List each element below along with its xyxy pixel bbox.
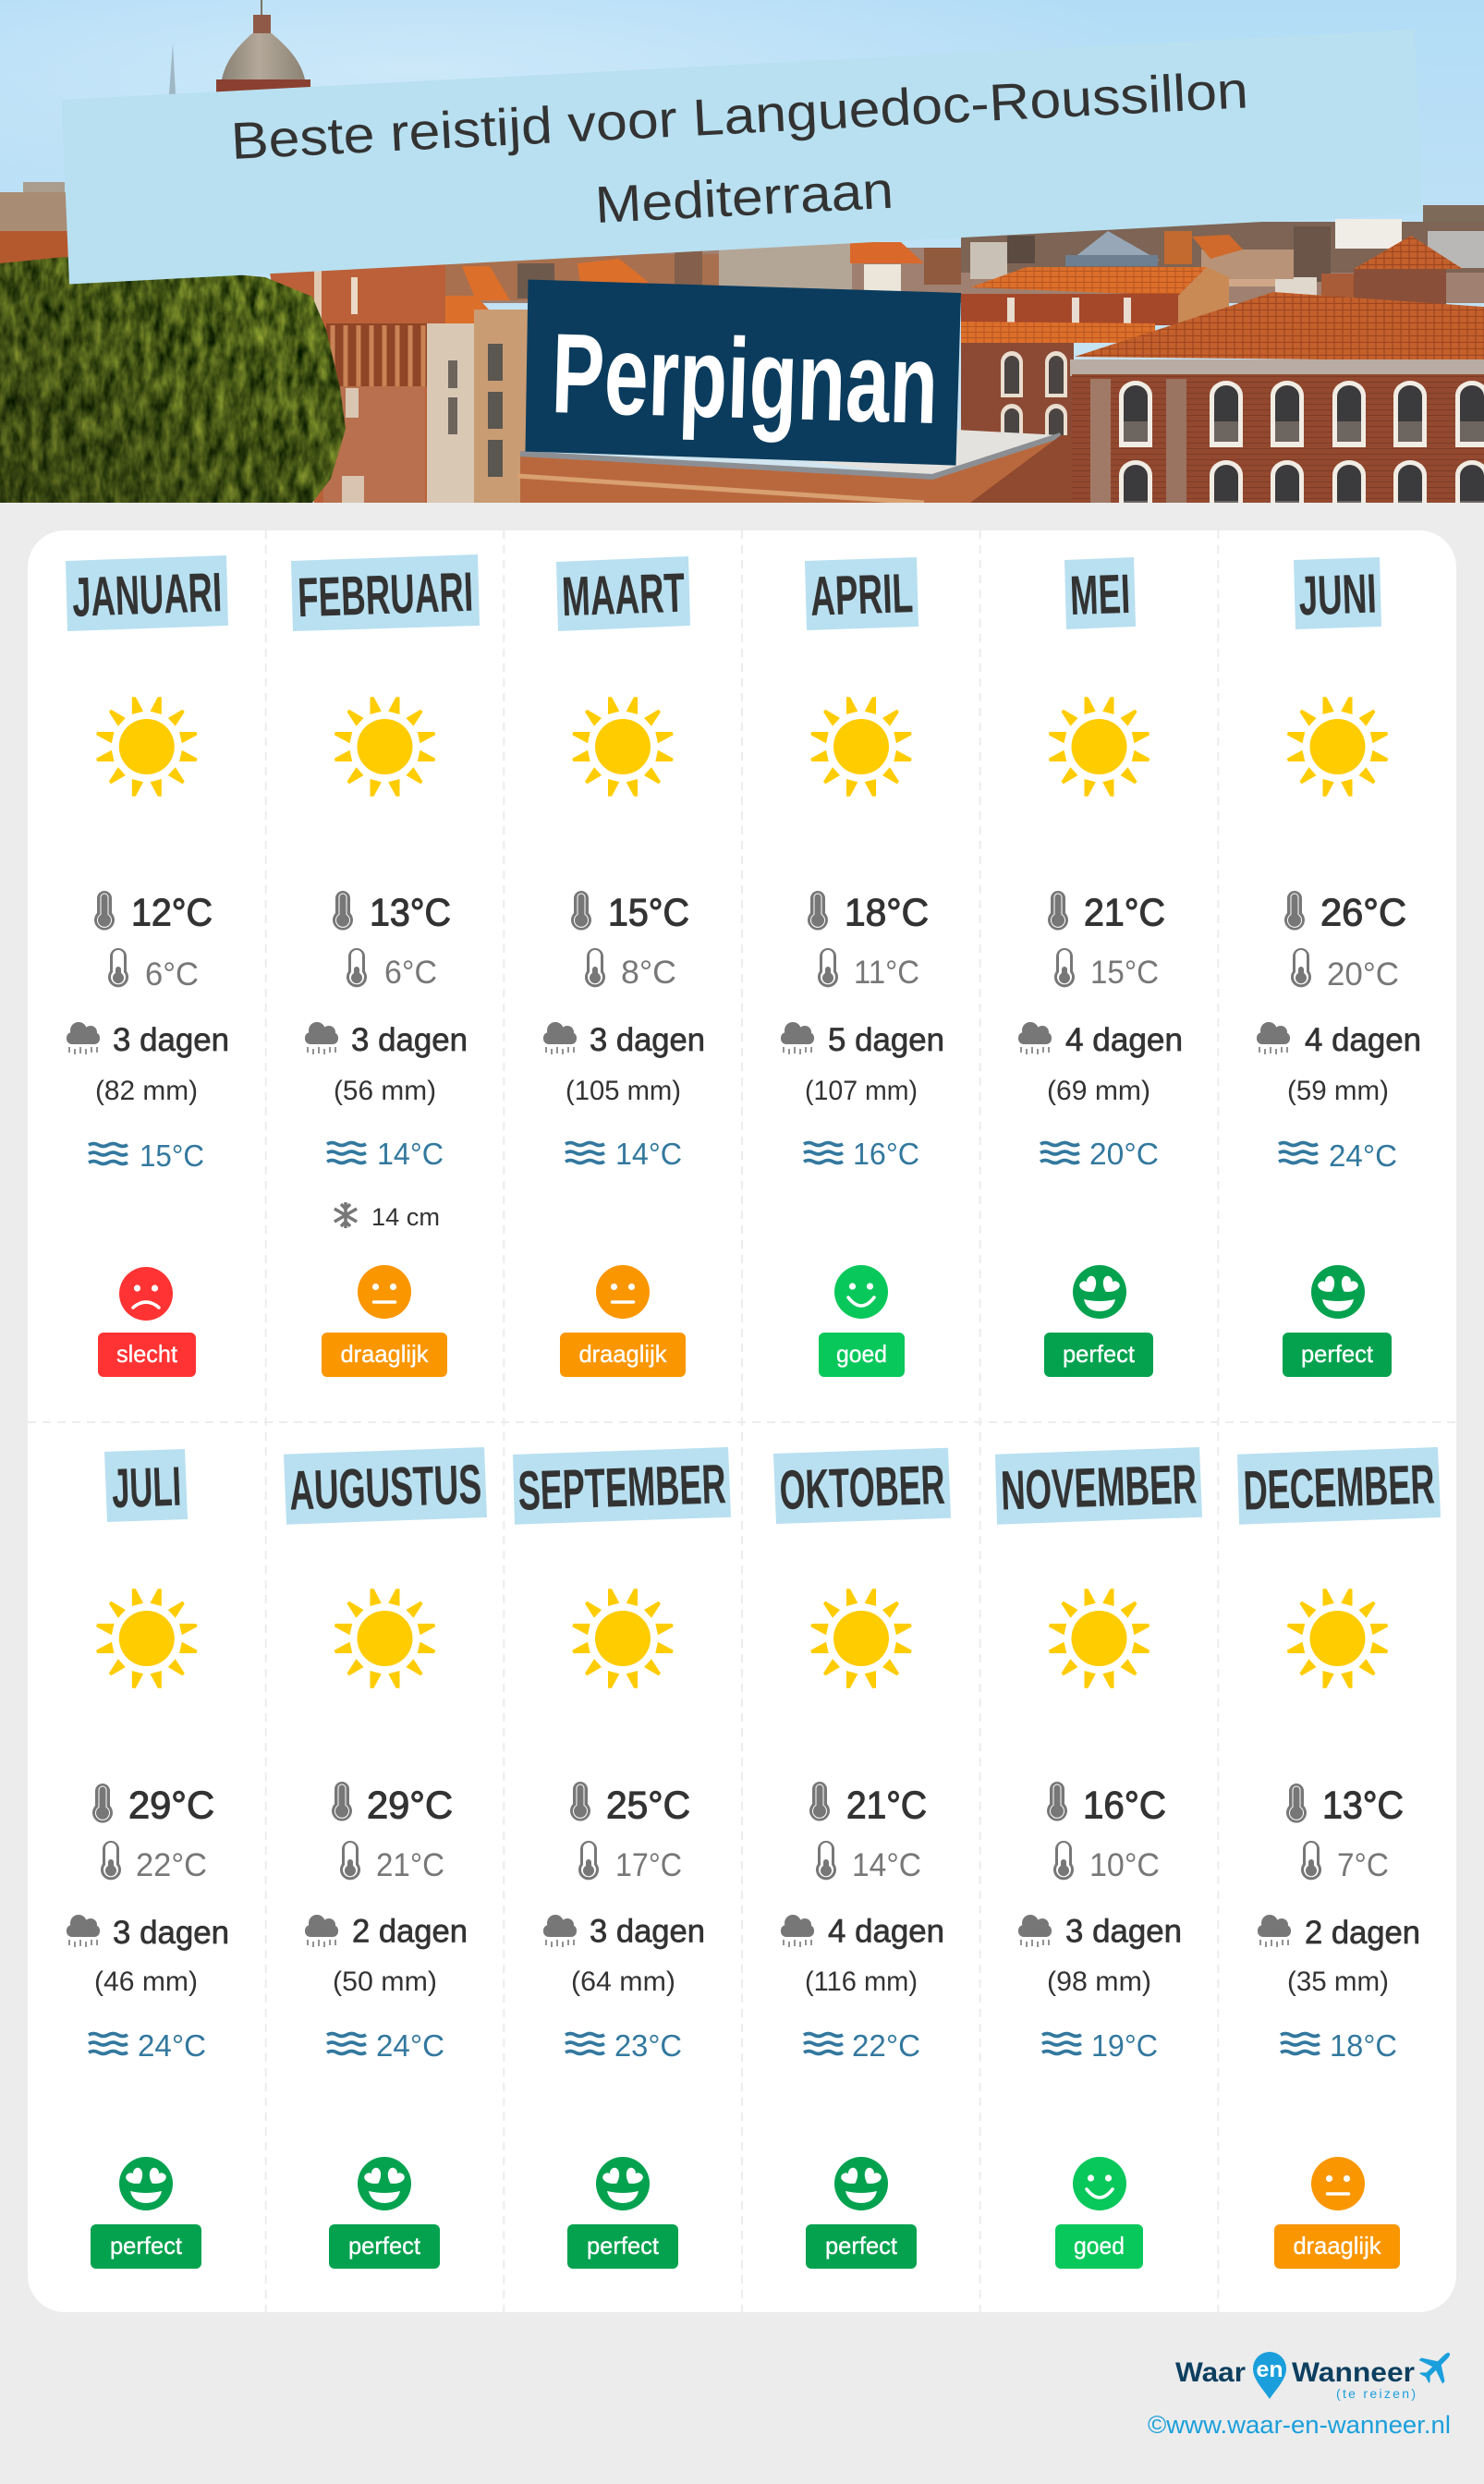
panel: december [1237,1447,1441,2269]
min temperature: 7°C [1337,1847,1389,1883]
rating badge [91,2224,201,2269]
snow depth: 14 cm [371,1203,440,1231]
rain days: 3 dagen [113,1022,229,1058]
sea temperature: 20°C [1089,1137,1159,1171]
sea temperature [1042,2028,1158,2063]
month label: JULI [111,1455,182,1519]
rainfall: (82 mm) [95,1076,198,1106]
panel: juni [1257,557,1421,1377]
city name: Perpignan [550,310,940,448]
rating badge [1283,1333,1392,1377]
month label [556,556,690,631]
rain days: 5 dagen [828,1022,944,1058]
sea temperature: 14°C [615,1137,682,1171]
rating face [358,1265,411,1319]
rating face [834,2157,888,2210]
max temperature [571,891,689,933]
sea temperature [1281,2028,1397,2063]
rating face [596,1265,650,1319]
min temperature [818,948,919,991]
min temperature [585,948,676,991]
sea temperature: 15°C [140,1138,204,1173]
min temperature [1053,1841,1160,1883]
min temperature: 6°C [145,956,199,992]
min temperature [1054,948,1159,991]
min temperature: 17°C [615,1847,682,1883]
logo: Waar en Wanneer: Waar [1175,2357,1246,2388]
rating badge: goed [1074,2232,1125,2259]
min temperature: 22°C [136,1847,207,1883]
rating badge [1044,1333,1153,1377]
sea temperature: 24°C [376,2028,444,2063]
rainfall: (35 mm) [1287,1966,1389,1997]
max temperature: 26°C [1320,891,1406,933]
rating badge [819,1333,905,1377]
month label: FEBRUARI [297,561,474,628]
max temperature [570,1782,690,1826]
title line 2: Mediterraan [593,161,894,234]
rating badge [98,1333,196,1377]
logo: Waar en Wanneer [1175,2342,1461,2401]
max temperature [809,1782,927,1826]
month label [291,554,480,631]
min temperature: 11°C [854,955,919,991]
month label: SEPTEMBER [517,1453,727,1522]
sea temperature: 18°C [1330,2028,1397,2063]
panel: maart [543,556,705,1377]
panel: augustus [284,1447,487,2269]
rainfall: (50 mm) [333,1966,437,1997]
rating badge: perfect [587,2232,660,2259]
rating badge [567,2224,678,2269]
rating badge: perfect [1301,1340,1374,1368]
max temperature: 18°C [845,891,929,933]
min temperature: 21°C [376,1847,444,1883]
rating face [1311,1265,1365,1319]
min temperature [1301,1841,1389,1883]
panel: juli [67,1449,229,2269]
month label [805,557,918,630]
min temperature [101,1841,207,1883]
rain days: 3 dagen [590,1022,705,1058]
rating badge [1274,2224,1400,2269]
icon: sun [335,1589,435,1688]
min temperature [347,948,437,991]
sea temperature [327,2028,444,2063]
rain days: 3 dagen [113,1915,229,1951]
snow depth [335,1202,440,1231]
sea temperature: 23°C [614,2028,682,2063]
rating badge: perfect [1063,1340,1136,1368]
rating badge [329,2224,440,2269]
rating badge: draaglijk [1294,2232,1381,2259]
icon: sun [572,697,674,797]
rating badge [1055,2224,1143,2269]
icon: sun [1049,697,1149,797]
max temperature [94,891,213,933]
max temperature: 29°C [128,1784,214,1826]
rainfall: (116 mm) [805,1966,918,1997]
month label: APRIL [809,562,914,627]
rating face [119,1267,173,1321]
rainfall: (69 mm) [1047,1076,1150,1106]
max temperature: 16°C [1083,1784,1166,1826]
min temperature [340,1841,444,1883]
sea temperature: 16°C [853,1137,919,1171]
month label [284,1447,487,1525]
max temperature [333,891,451,933]
rain days: 4 dagen [828,1913,944,1950]
month label [1294,557,1381,629]
month label [773,1448,951,1524]
icon: sun [96,697,198,797]
sea temperature [804,1137,919,1171]
max temperature: 12°C [131,891,213,933]
month label [513,1447,731,1525]
min temperature [816,1841,921,1883]
min temperature [108,948,199,992]
sea temperature: 24°C [138,2028,206,2063]
min temperature [578,1841,682,1883]
rainfall: (56 mm) [334,1076,436,1106]
month label: JUNI [1297,563,1378,627]
sea temperature [89,2028,206,2063]
sea temperature [566,2028,682,2063]
rating badge: perfect [110,2232,183,2259]
rating face [1073,2157,1126,2210]
rain days: 3 dagen [590,1913,705,1950]
icon: sun [810,1589,912,1688]
min temperature: 15°C [1090,955,1159,991]
min temperature [1291,948,1399,992]
rating face [358,2157,411,2210]
panel: oktober [773,1448,951,2269]
rating face [834,1265,888,1319]
max temperature: 13°C [1322,1784,1404,1826]
rain days: 4 dagen [1065,1022,1183,1058]
max temperature: 21°C [846,1784,927,1826]
icon: sun [335,697,435,797]
month label: MEI [1069,563,1131,627]
max temperature [332,1782,453,1826]
month label: MAART [561,562,686,627]
rating face [1311,2157,1365,2210]
sea temperature [566,1137,682,1171]
rainfall: (46 mm) [94,1966,198,1997]
calendar card [28,530,1456,2312]
month label: NOVEMBER [1000,1453,1198,1522]
tree [0,257,346,503]
month label: JANUARI [71,561,223,628]
rain days: 3 dagen [1065,1913,1182,1950]
max temperature: 15°C [608,891,689,933]
max temperature: 29°C [367,1784,453,1826]
panel: januari [66,555,229,1377]
rating face [1073,1265,1126,1319]
icon: sun [572,1589,674,1688]
rating badge: perfect [348,2232,421,2259]
panel: februari [291,554,480,1377]
min temperature: 8°C [621,955,676,991]
month label [66,555,228,631]
logo: Waar en Wanneer: (te reizen) [1336,2386,1416,2401]
rain days: 2 dagen [352,1913,468,1950]
max temperature [808,891,929,933]
rainfall: (59 mm) [1287,1076,1389,1106]
min temperature: 10°C [1089,1847,1160,1883]
min temperature: 6°C [384,955,437,991]
sea temperature [804,2028,920,2063]
hero photo: Perpignan rooftops [0,0,1484,527]
rating badge [806,2224,917,2269]
logo: Waar en Wanneer: Wanneer [1292,2357,1415,2388]
rating face [596,2157,650,2210]
rainfall: (107 mm) [805,1076,918,1106]
panel: november [995,1447,1202,2269]
rating badge: slecht [116,1340,178,1368]
city banner [525,279,961,466]
rainfall: (64 mm) [571,1966,675,1997]
panel: april [781,557,944,1377]
icon: sun [1287,697,1388,797]
panel: mei [1018,557,1183,1377]
max temperature: 21°C [1084,891,1165,933]
icon: map pin: en [1257,2357,1283,2382]
max temperature [1047,1782,1166,1826]
sea temperature: 24°C [1329,1138,1397,1173]
icon: sun [1049,1589,1149,1688]
max temperature: 13°C [370,891,451,933]
sea temperature [327,1137,444,1171]
website link: ©www.waar-en-wanneer.nl [1148,2411,1451,2439]
max temperature [1286,1784,1404,1826]
max temperature: 25°C [606,1784,690,1826]
sea temperature [1040,1137,1159,1171]
rating badge: draaglijk [340,1340,429,1368]
sea temperature: 19°C [1091,2028,1158,2063]
icon: map pin [1253,2352,1286,2399]
rating face [119,2157,173,2210]
rainfall: (105 mm) [566,1076,681,1106]
month label [104,1449,188,1522]
max temperature [1048,891,1165,933]
month label [1064,557,1136,629]
panel: september [513,1447,731,2269]
month label: OKTOBER [778,1454,946,1521]
sea temperature: 22°C [852,2028,920,2063]
sea temperature: 14°C [377,1137,444,1171]
title banner [62,30,1422,285]
rating badge: perfect [825,2232,898,2259]
month label: AUGUSTUS [288,1453,482,1522]
sea temperature [1279,1138,1397,1173]
min temperature: 14°C [852,1847,921,1883]
rating badge [322,1333,447,1377]
title line 1: Beste reistijd voor Languedoc-Roussillon [229,60,1249,170]
rain days: 4 dagen [1305,1022,1421,1058]
icon: sun [96,1589,198,1688]
rainfall: (98 mm) [1047,1966,1151,1997]
rating badge: goed [836,1340,887,1368]
rating badge [560,1333,686,1377]
month label [995,1447,1202,1525]
icon: sun [1287,1589,1388,1688]
rating badge: draaglijk [578,1340,667,1368]
icon: plane [1413,2342,1461,2390]
rain days: 3 dagen [351,1022,468,1058]
min temperature: 20°C [1327,956,1399,992]
icon: sun [810,697,912,797]
sea temperature [89,1138,204,1173]
rain days: 2 dagen [1305,1915,1420,1951]
